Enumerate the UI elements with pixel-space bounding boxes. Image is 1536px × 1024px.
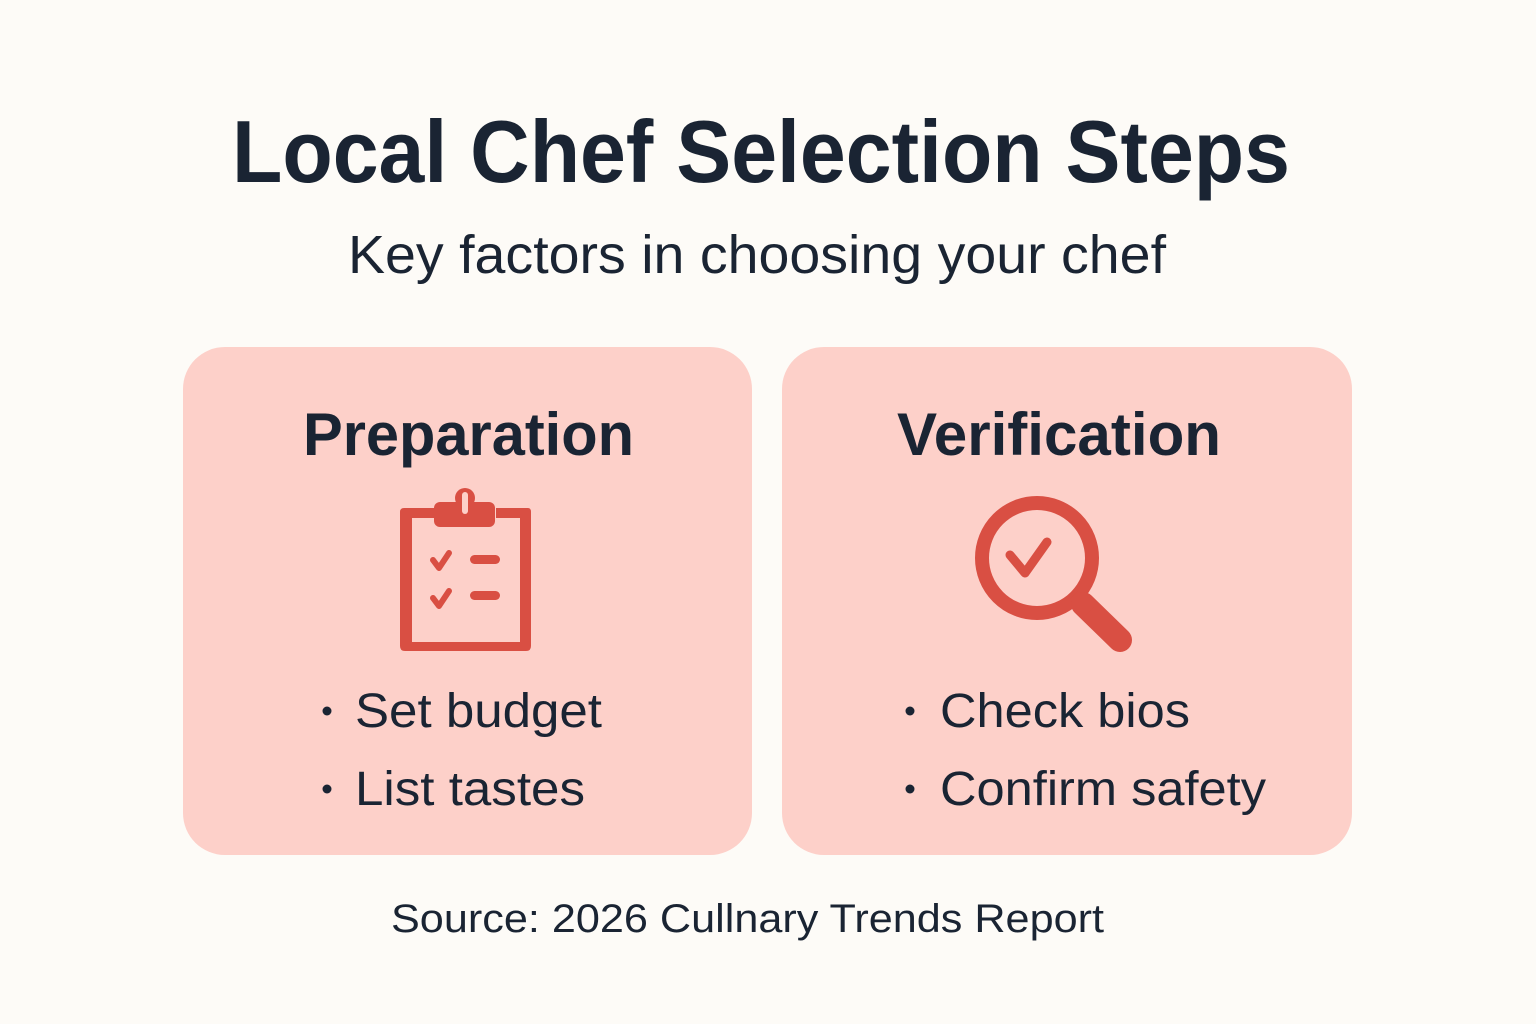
bullet list: verification: Check bios: [940, 685, 1190, 738]
heading: verification: Verification: [897, 401, 1221, 468]
icon: magnifier with check: [982, 503, 1120, 640]
icon: clipboard: [400, 488, 531, 651]
title: Local Chef Selection Steps: [232, 102, 1290, 201]
subtitle: Key factors in choosing your chef: [348, 225, 1167, 285]
panel: preparation: [183, 347, 752, 855]
bullet list: preparation: [322, 685, 602, 816]
bullet list: verification: Confirm safety: [940, 763, 1266, 816]
bullet list: preparation: Set budget: [355, 685, 602, 738]
bullet list: preparation: List tastes: [355, 763, 585, 816]
heading: preparation: Preparation: [303, 401, 634, 468]
panel: verification: [782, 347, 1352, 855]
bullet list: verification: [906, 685, 1266, 816]
source note: Source: 2026 Cullnary Trends Report: [391, 897, 1104, 941]
